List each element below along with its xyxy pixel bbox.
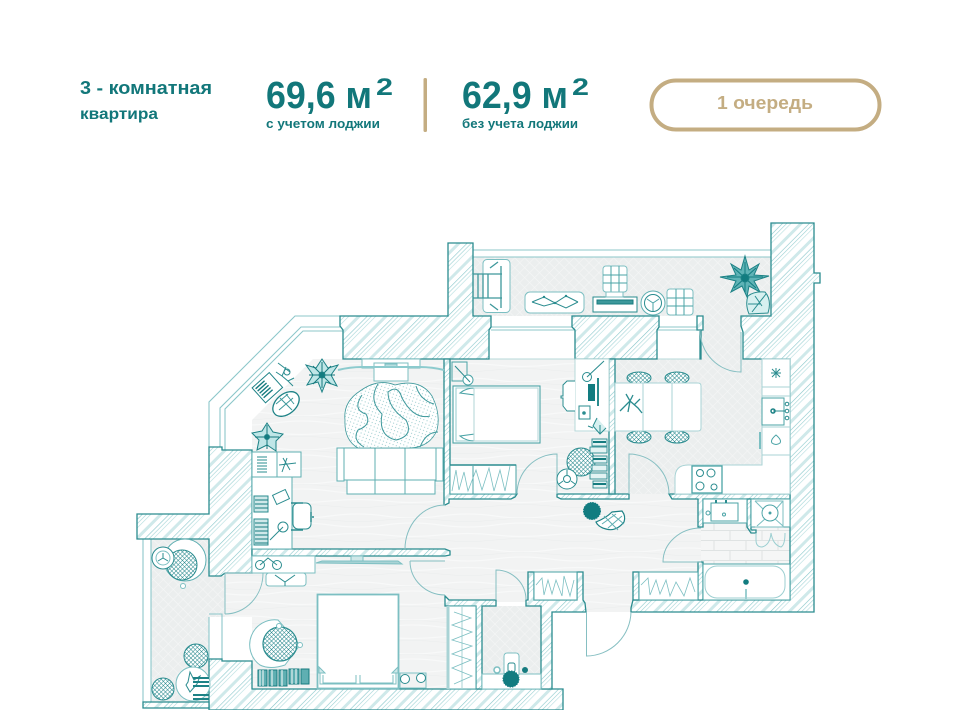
bedroom 1: bed [453, 386, 540, 443]
floor plan [137, 223, 820, 710]
loggia furniture [473, 260, 693, 315]
area with loggia: 69,6 м [266, 75, 372, 117]
bathroom: shower [751, 499, 790, 527]
badge: construction phase: 1 очередь [717, 93, 813, 113]
floors [151, 257, 790, 702]
bedroom 1: lamp, wardrobe [450, 362, 516, 494]
living room: rug [345, 383, 438, 448]
bedroom 1: desk [561, 359, 609, 434]
windows [143, 250, 771, 702]
area without loggia [462, 74, 589, 131]
bedroom 1: armchair and bookshelf [557, 439, 607, 489]
kitchen: table and chairs [615, 372, 701, 443]
bedroom 2: armchair, books, nightstands [250, 620, 426, 688]
badge: construction phase [652, 80, 880, 130]
hall: wardrobes [448, 572, 698, 689]
bedroom 2: bed [318, 594, 398, 688]
toilet room fixtures [482, 653, 541, 689]
doors [225, 330, 785, 656]
living room: TV unit [338, 359, 444, 381]
bathroom: sink room [703, 499, 747, 523]
area with loggia [266, 74, 393, 131]
area with loggia: с учетом лоджии [266, 116, 380, 131]
area without loggia: 2 [572, 74, 589, 101]
living room: plants and chair [252, 359, 338, 451]
area without loggia: 62,9 м [462, 75, 568, 117]
living room: white cabinets and sofa [252, 448, 443, 549]
bathroom: tub [703, 564, 790, 600]
living room: desk, books and chair [254, 457, 313, 545]
heading: apartment type [80, 78, 212, 123]
heading: apartment type: 3 - комнатная [80, 78, 212, 98]
gold divider [424, 78, 427, 132]
kitchen: counter with sink and stove [675, 359, 790, 494]
area with loggia: 2 [376, 74, 393, 101]
area without loggia: без учета лоджии [462, 116, 578, 131]
hall: rug and plant [584, 502, 625, 530]
heading: apartment type: квартира [80, 106, 158, 123]
loggia plants [720, 256, 769, 314]
bedroom 2: closet, TV [252, 556, 402, 586]
balcony furniture [152, 539, 210, 701]
walls [137, 223, 820, 710]
